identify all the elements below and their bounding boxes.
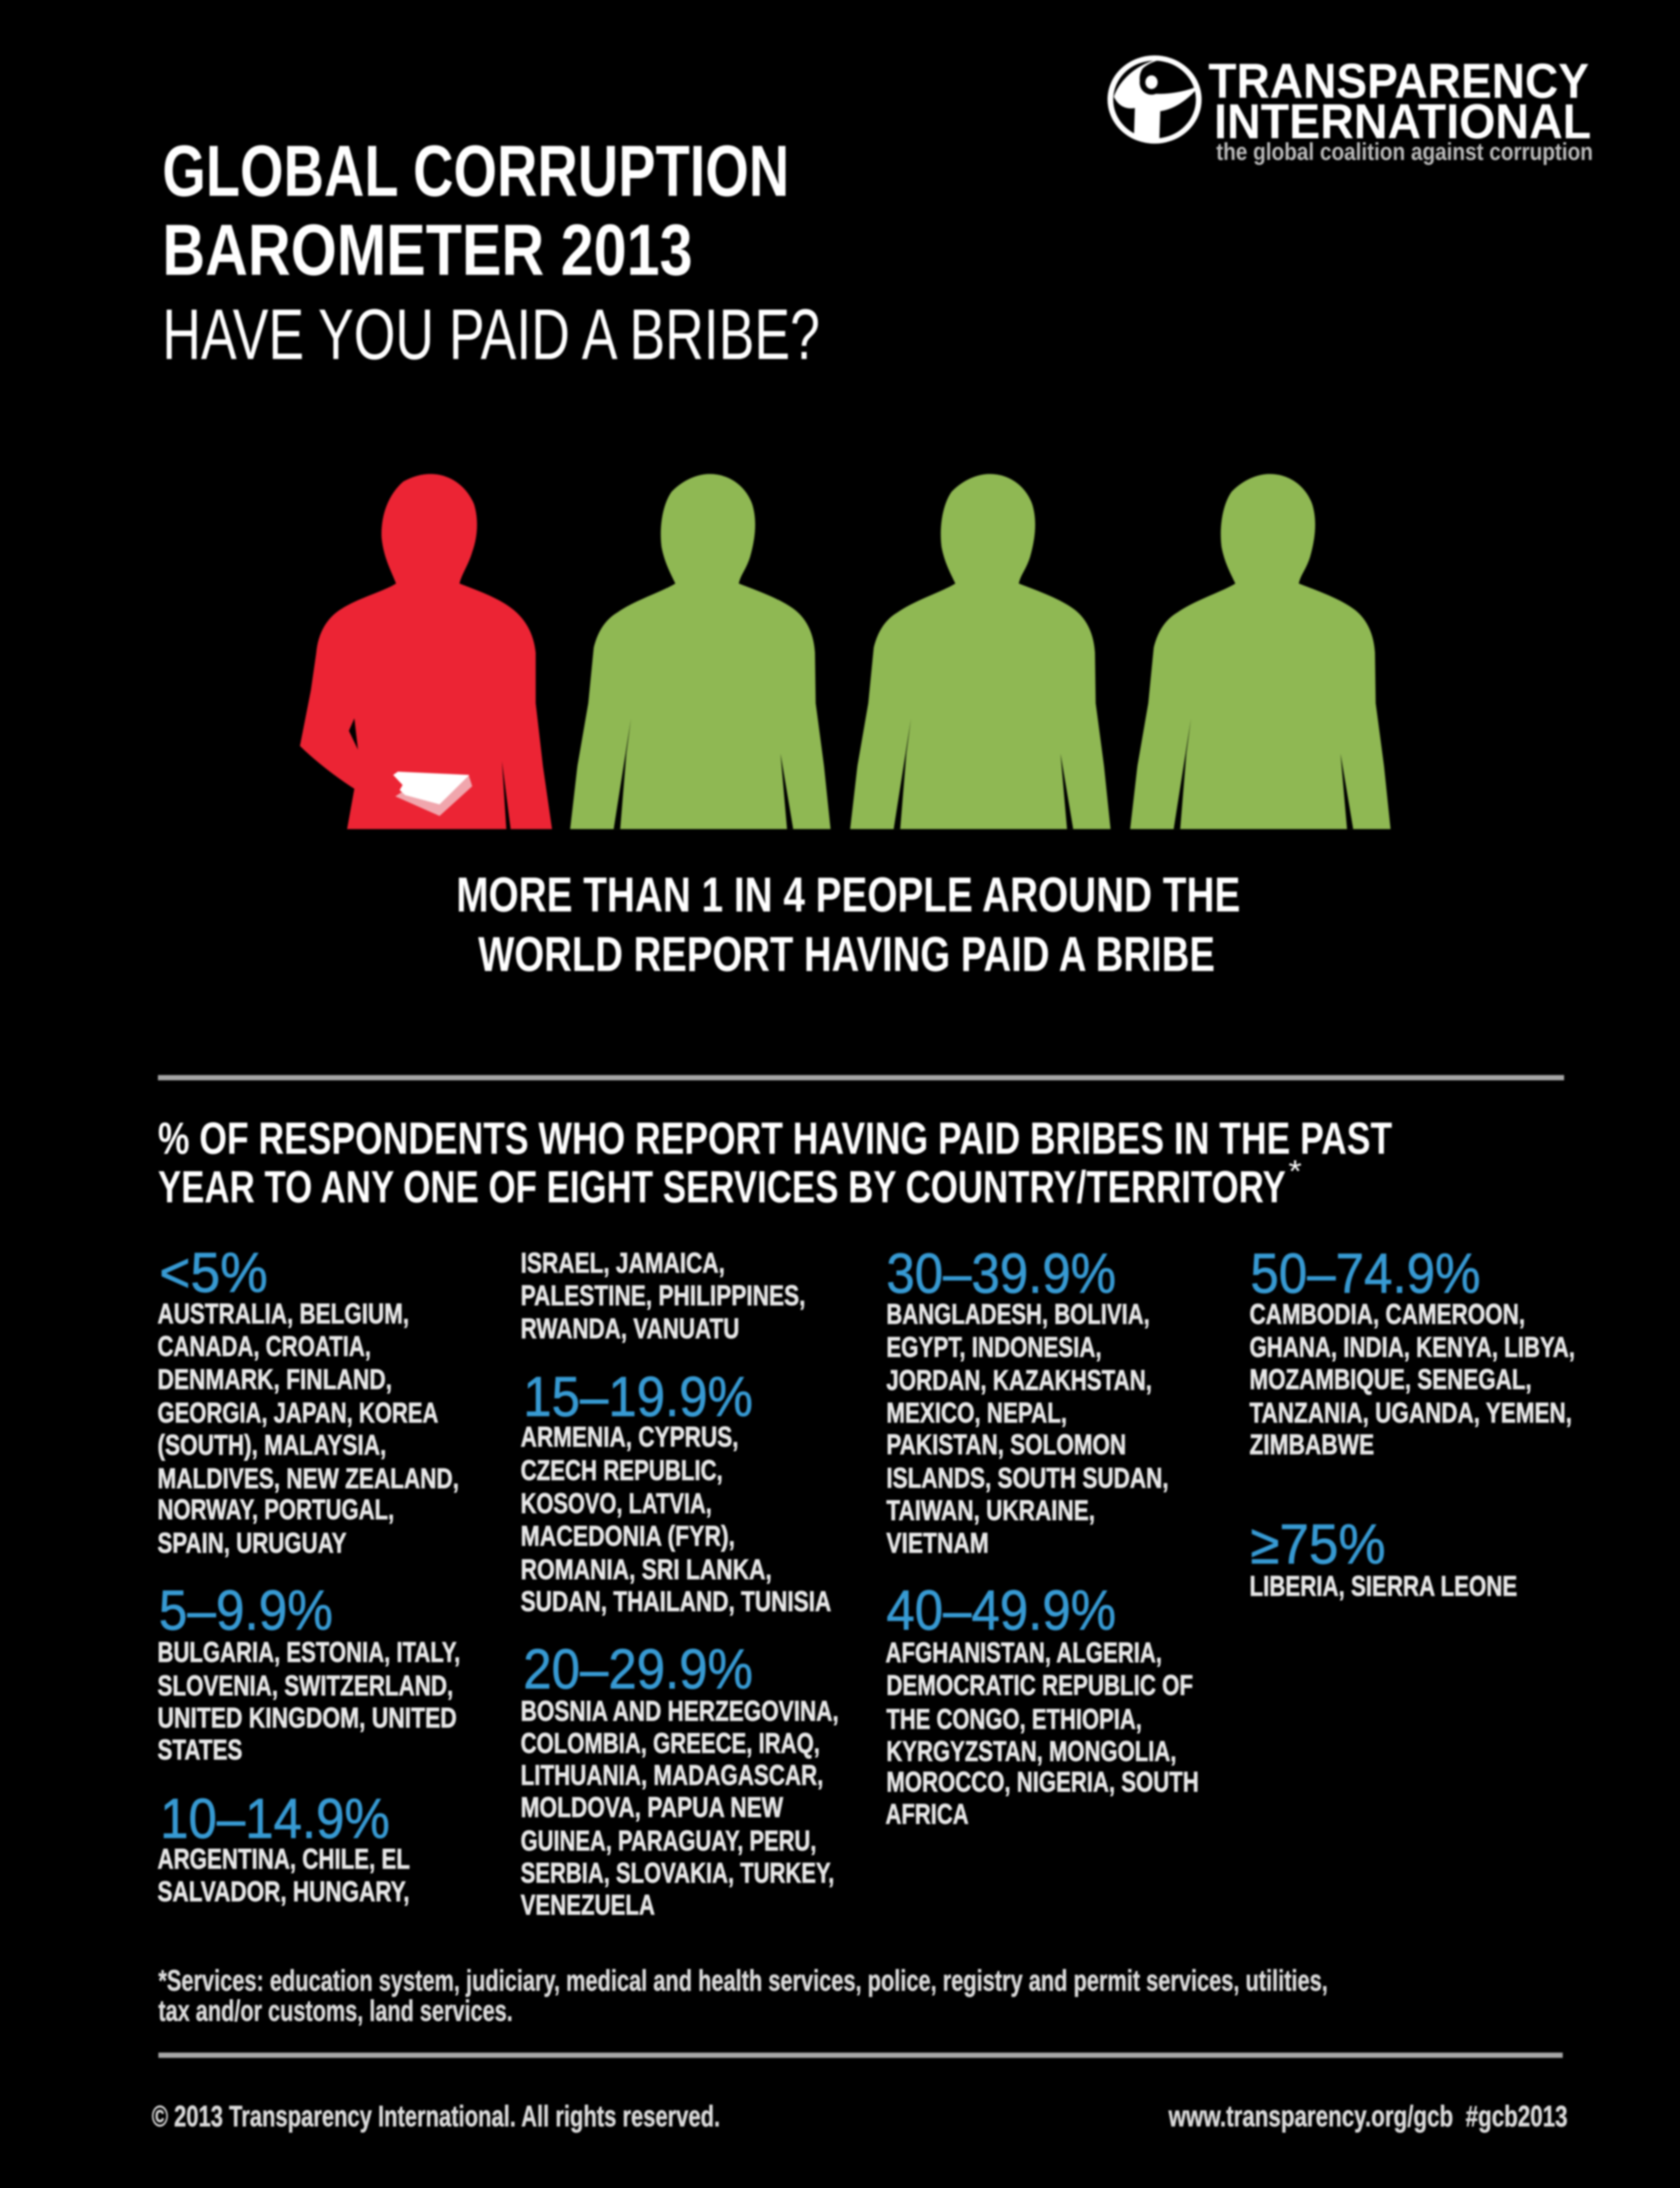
- country list: GUINEA, PARAGUAY, PERU,: [521, 1825, 816, 1857]
- country list: TAIWAN, UKRAINE,: [886, 1494, 1095, 1526]
- footnote: [158, 1964, 1328, 2027]
- country list: [158, 1636, 460, 1766]
- country list: STATES: [158, 1734, 242, 1766]
- title line 2: BAROMETER 2013: [162, 209, 693, 290]
- pictogram: four people: [300, 474, 1390, 829]
- icon: green person 2: [850, 474, 1110, 829]
- country list: SLOVENIA, SWITZERLAND,: [158, 1669, 453, 1701]
- country list: ROMANIA, SRI LANKA,: [521, 1553, 772, 1585]
- country list: AFGHANISTAN, ALGERIA,: [886, 1637, 1162, 1669]
- country list: ISLANDS, SOUTH SUDAN,: [886, 1462, 1169, 1494]
- copyright: © 2013 Transparency International. All rights reserved.: [152, 2100, 720, 2133]
- country list: GEORGIA, JAPAN, KOREA: [158, 1397, 438, 1429]
- country list: MOZAMBIQUE, SENEGAL,: [1250, 1364, 1532, 1395]
- subtitle: HAVE YOU PAID A BRIBE?: [162, 295, 820, 375]
- country list: DEMOCRATIC REPUBLIC OF: [886, 1669, 1193, 1701]
- icon: green person 3: [1130, 474, 1390, 829]
- title line 1: GLOBAL CORRUPTION: [162, 130, 789, 211]
- logo wordmark: TRANSPARENCY: TRANSPARENCY: [1208, 53, 1589, 109]
- country list: EGYPT, INDONESIA,: [886, 1331, 1102, 1363]
- bracket: 30 to 39.9%: [886, 1241, 1169, 1559]
- country list: [521, 1695, 839, 1921]
- bracket: 10 to 14.9% continued: [521, 1247, 805, 1344]
- country list: BULGARIA, ESTONIA, ITALY,: [158, 1636, 460, 1668]
- caption line 1: MORE THAN 1 IN 4 PEOPLE AROUND THE: [456, 867, 1240, 922]
- logo wordmark: INTERNATIONAL: INTERNATIONAL: [1214, 94, 1591, 149]
- country list: JORDAN, KAZAKHSTAN,: [886, 1364, 1152, 1396]
- country list: AFRICA: [886, 1798, 969, 1830]
- country list: VIETNAM: [886, 1527, 989, 1559]
- bracket: 20 to 29.9%: [521, 1637, 839, 1921]
- country list: BOSNIA AND HERZEGOVINA,: [521, 1695, 839, 1727]
- country list: CAMBODIA, CAMEROON,: [1250, 1298, 1525, 1330]
- country list: PAKISTAN, SOLOMON: [886, 1429, 1126, 1461]
- country list: [886, 1637, 1199, 1830]
- country list: LITHUANIA, MADAGASCAR,: [521, 1759, 823, 1791]
- footnote: tax and/or customs, land services.: [158, 1995, 513, 2027]
- country list: DENMARK, FINLAND,: [158, 1364, 392, 1395]
- country list: THE CONGO, ETHIOPIA,: [886, 1703, 1142, 1735]
- range label: 5–9.9%: [159, 1578, 333, 1642]
- country list: ARMENIA, CYPRUS,: [521, 1421, 738, 1453]
- country list: [521, 1421, 831, 1617]
- country list: KOSOVO, LATVIA,: [521, 1487, 712, 1519]
- country list: CANADA, CROATIA,: [158, 1330, 371, 1362]
- icon: green person 1: [570, 474, 830, 829]
- bracket: 40 to 49.9%: [886, 1578, 1199, 1830]
- range label: 50–74.9%: [1250, 1241, 1480, 1305]
- title block: [162, 130, 820, 375]
- country list: MACEDONIA (FYR),: [521, 1520, 735, 1552]
- country list: CZECH REPUBLIC,: [521, 1455, 723, 1487]
- bracket: 50 to 74.9%: [1250, 1241, 1575, 1461]
- range label: 30–39.9%: [886, 1241, 1116, 1305]
- country list: AUSTRALIA, BELGIUM,: [158, 1298, 409, 1329]
- country list: MOROCCO, NIGERIA, SOUTH: [886, 1766, 1199, 1798]
- country list: COLOMBIA, GREECE, IRAQ,: [521, 1727, 820, 1759]
- country list: (SOUTH), MALAYSIA,: [158, 1429, 386, 1461]
- bracket: 10 to 14.9% continued: PALESTINE, PHILIPPINES,: [521, 1280, 805, 1311]
- range label: 10–14.9%: [160, 1787, 390, 1850]
- country list: UNITED KINGDOM, UNITED: [158, 1702, 457, 1734]
- country list: VENEZUELA: [521, 1889, 655, 1921]
- range label: 40–49.9%: [886, 1578, 1116, 1642]
- bracket: 75% and over: [1250, 1512, 1517, 1602]
- country list: SPAIN, URUGUAY: [158, 1527, 346, 1559]
- bracket: 10 to 14.9% continued: RWANDA, VANUATU: [521, 1313, 739, 1344]
- country list: [1250, 1298, 1575, 1461]
- country list, first part: [158, 1843, 410, 1907]
- country list: BANGLADESH, BOLIVIA,: [886, 1298, 1150, 1330]
- bracket: 15 to 19.9%: [521, 1365, 831, 1617]
- bracket: 5 to 9.9%: [158, 1578, 460, 1766]
- country list: [158, 1298, 459, 1559]
- country list: LIBERIA, SIERRA LEONE: [1250, 1570, 1517, 1602]
- bracket: 10 to 14.9%: [158, 1787, 410, 1907]
- icon: red person holding bribe: [300, 474, 552, 829]
- bracket: 10 to 14.9% continued: ISRAEL, JAMAICA,: [521, 1247, 725, 1279]
- logo: Transparency International: [1110, 53, 1593, 165]
- country list: MOLDOVA, PAPUA NEW: [521, 1791, 783, 1823]
- section heading: [158, 1113, 1392, 1212]
- country list: MALDIVES, NEW ZEALAND,: [158, 1462, 459, 1494]
- country list, first part: SALVADOR, HUNGARY,: [158, 1876, 410, 1907]
- bracket: under 5%: [158, 1241, 459, 1559]
- pictogram caption: [456, 867, 1240, 982]
- country list: [886, 1298, 1169, 1559]
- range label: <5%: [159, 1241, 268, 1304]
- country list: NORWAY, PORTUGAL,: [158, 1494, 394, 1525]
- range label: ≥75%: [1250, 1512, 1386, 1576]
- country list: SUDAN, THAILAND, TUNISIA: [521, 1585, 831, 1617]
- country list, first part: ARGENTINA, CHILE, EL: [158, 1843, 410, 1875]
- country list: ZIMBABWE: [1250, 1429, 1374, 1461]
- range label: 15–19.9%: [523, 1365, 753, 1428]
- logo tagline: the global coalition against corruption: [1216, 139, 1593, 165]
- country list: KYRGYZSTAN, MONGOLIA,: [886, 1736, 1176, 1767]
- range label: 20–29.9%: [523, 1637, 753, 1701]
- caption line 2: WORLD REPORT HAVING PAID A BRIBE: [478, 927, 1215, 982]
- icon: globe with figure: [1110, 58, 1200, 141]
- heading asterisk: *: [1288, 1154, 1302, 1189]
- country list: MEXICO, NEPAL,: [886, 1397, 1067, 1429]
- country list: SERBIA, SLOVAKIA, TURKEY,: [521, 1857, 834, 1889]
